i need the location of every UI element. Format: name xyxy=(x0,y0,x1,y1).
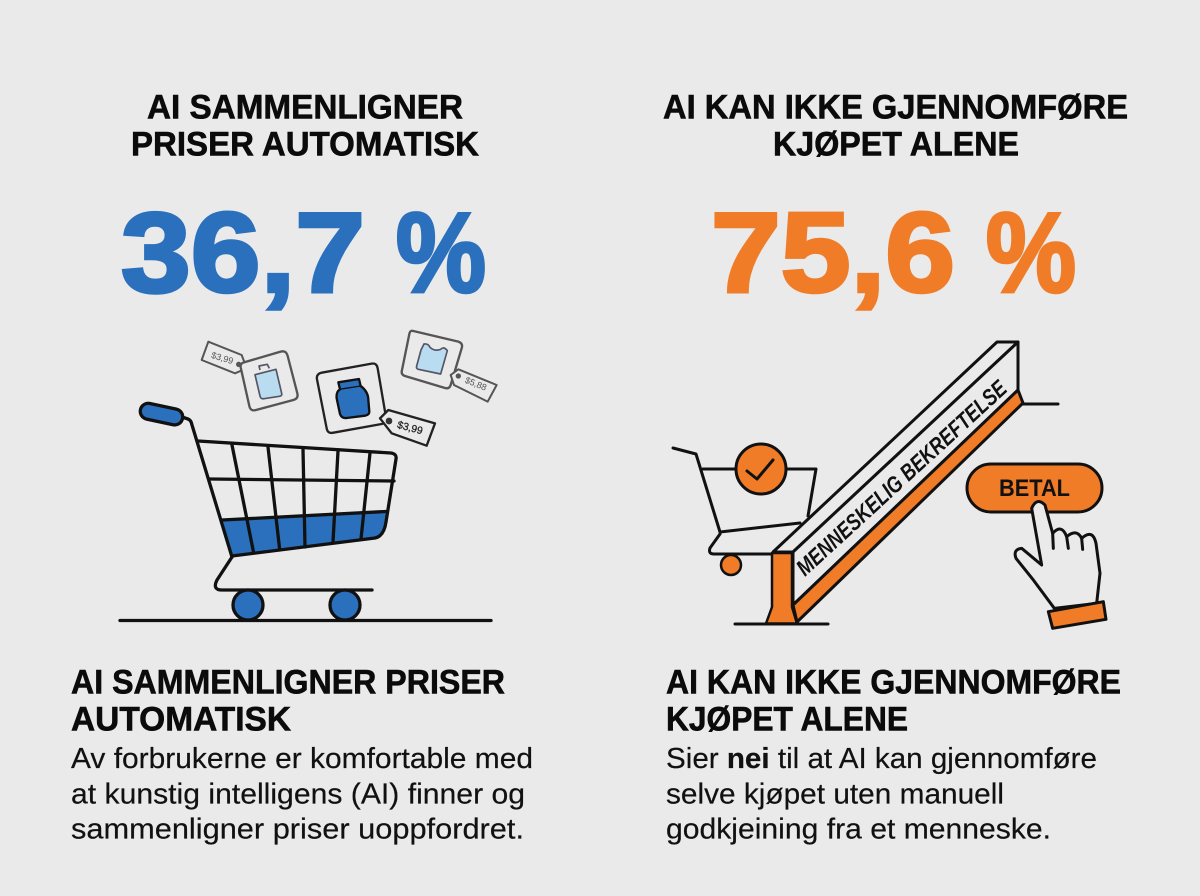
big number 36,7 %: % xyxy=(396,190,486,316)
top heading right: AI KAN IKKE GJENNOMFØRE xyxy=(663,88,1128,126)
illustration: shopping cart with price tags xyxy=(120,331,497,620)
big number 75,6 % xyxy=(711,190,1076,316)
icon: product card with shirt and tag xyxy=(402,331,497,402)
lower heading left: AI SAMMENLIGNER PRISER xyxy=(71,664,505,702)
body text left: sammenligner priser uoppfordret. xyxy=(71,814,524,846)
big number 36,7 % xyxy=(121,190,486,316)
icon: product card with bottle and tag xyxy=(202,342,298,410)
pay button xyxy=(967,464,1102,512)
big number 75,6 %: 75,6 xyxy=(711,190,955,316)
icon: product card with jar and tag: $3,99 xyxy=(396,420,424,437)
panel: right column xyxy=(663,88,1128,846)
body text right: godkjeining fra et menneske. xyxy=(666,814,1051,846)
icon: cart handle xyxy=(139,402,184,426)
icon: product card with bottle and tag: $3,99 xyxy=(210,350,235,366)
icon: small cart xyxy=(673,448,816,554)
body text left xyxy=(71,743,533,846)
body text right xyxy=(666,743,1097,846)
big number 75,6 %: % xyxy=(986,190,1076,316)
icon: check badge xyxy=(736,444,786,494)
ground lines xyxy=(735,404,1058,624)
lower heading right: KJØPET ALENE xyxy=(666,700,908,738)
body text left: at kunstig intelligens (AI) finner og xyxy=(71,778,525,810)
top heading left xyxy=(131,88,479,164)
top heading right xyxy=(663,88,1128,164)
icon: cart frame xyxy=(182,417,396,590)
top heading right: KJØPET ALENE xyxy=(773,126,1019,164)
lower heading left: AUTOMATISK xyxy=(71,700,291,738)
barrier arm xyxy=(773,342,1023,622)
icon: cart basket blue fill xyxy=(222,512,386,556)
icon: product card with shirt and tag: $5,88 xyxy=(464,375,488,393)
body text right: selve kjøpet uten manuell xyxy=(666,778,1004,810)
panel: left column xyxy=(71,88,533,846)
barrier label: MENNESKELIG BEKREFTELSE xyxy=(791,375,1012,581)
lower heading right xyxy=(666,664,1121,738)
top heading left: PRISER AUTOMATISK xyxy=(131,126,479,164)
icon: cart wheels xyxy=(233,590,360,620)
illustration: cart blocked by barrier, pay button xyxy=(673,342,1106,628)
icon: cart wheel xyxy=(721,555,741,575)
big number 36,7 %: 36,7 xyxy=(121,190,365,316)
body text left: Av forbrukerne er komfortable med xyxy=(71,743,533,775)
pay button: BETAL xyxy=(999,475,1070,502)
icon: pointing hand xyxy=(1015,502,1106,628)
top heading left: AI SAMMENLIGNER xyxy=(147,88,463,126)
icon: product card with jar and tag xyxy=(317,364,435,446)
barrier post xyxy=(766,553,797,624)
lower heading right: AI KAN IKKE GJENNOMFØRE xyxy=(666,664,1121,702)
body text right: Sier nei til at AI kan gjennomføre xyxy=(666,743,1097,775)
ground line xyxy=(120,619,491,622)
lower heading left xyxy=(71,664,505,738)
